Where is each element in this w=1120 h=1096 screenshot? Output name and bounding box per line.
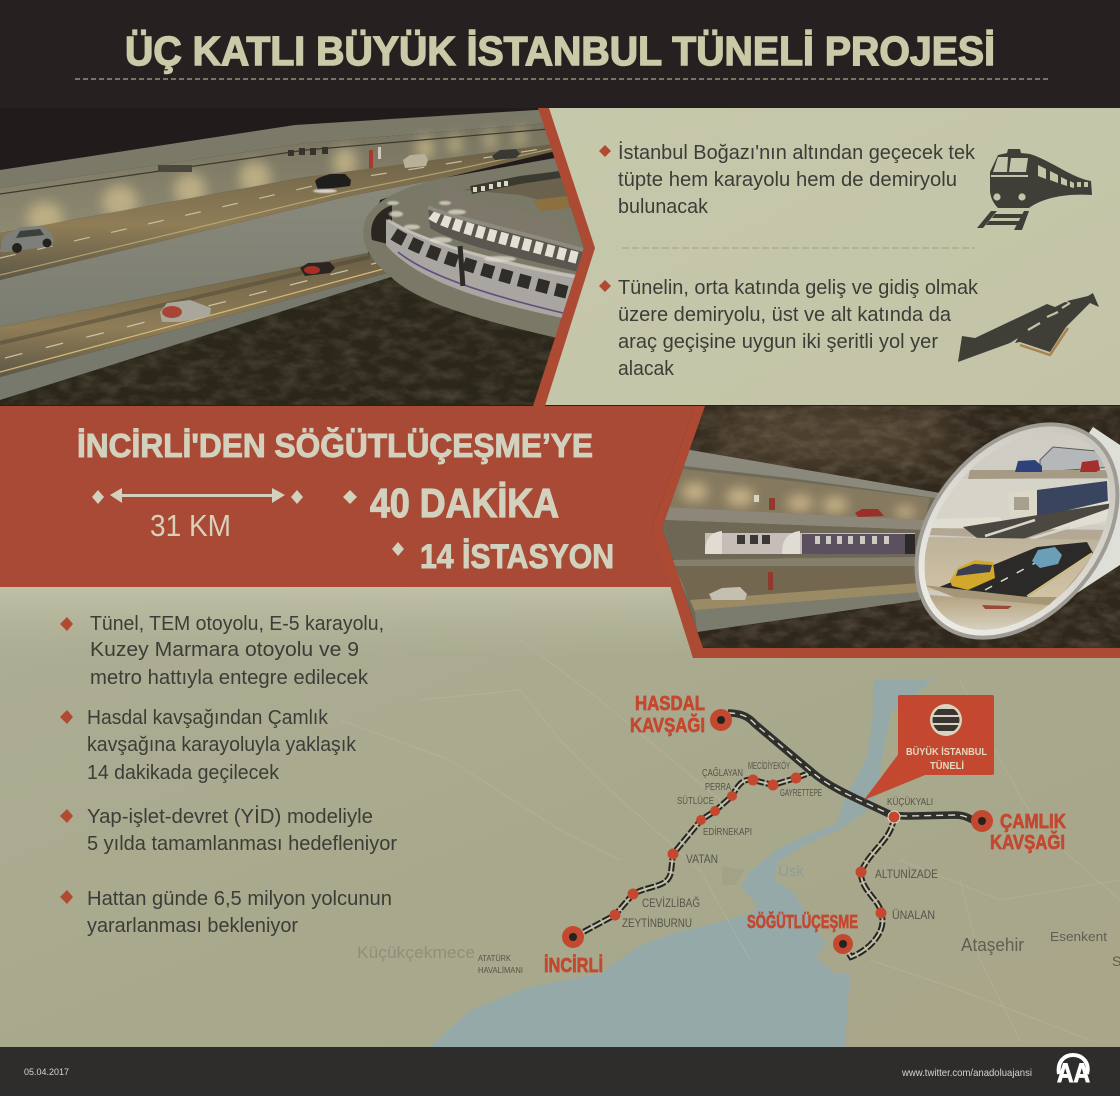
bullet item 1 xyxy=(60,612,384,689)
text: first panel paragraph xyxy=(618,141,976,218)
lower road xyxy=(937,542,1093,597)
bullet item 3: Yap-işlet-devret (YİD) modeliyle xyxy=(87,805,373,828)
station labels: VATAN xyxy=(686,852,718,866)
photo: tunnel cross-section xyxy=(662,406,1120,648)
chevron border: cross-section photo xyxy=(652,406,1120,658)
middle concrete slab xyxy=(0,178,444,327)
middle level wall xyxy=(1108,481,1109,482)
station labels: SÜTLÜCE xyxy=(677,795,714,807)
label: Çamlık Kavşağı: ÇAMLIK xyxy=(1000,811,1066,833)
title: ÜÇ KATLI BÜYÜK İSTANBUL TÜNELİ PROJESİ xyxy=(125,28,995,74)
station labels: MECİDİYEKÖY xyxy=(748,759,790,772)
stat: 40 dakika: 40 DAKİKA xyxy=(370,480,559,526)
map label: Üsk: Üsk xyxy=(778,862,804,880)
label: Söğütlüçeşme: SÖĞÜTLÜÇEŞME xyxy=(747,911,858,932)
station labels: ÇAĞLAYAN xyxy=(702,766,743,779)
car: white rear xyxy=(160,300,211,322)
rock below tunnel xyxy=(0,278,555,405)
label: Çamlık Kavşağı: KAVŞAĞI xyxy=(990,830,1065,854)
map: water xyxy=(430,680,933,1047)
terminal: İncirli xyxy=(562,926,584,948)
car: grey suv xyxy=(0,226,54,253)
footer date: 05.04.2017 xyxy=(24,1067,69,1078)
text: second panel paragraph: araç geçişine uygun iki şeritli yol yer xyxy=(618,330,938,353)
tube interior xyxy=(924,446,1110,630)
blue car xyxy=(1032,547,1062,568)
right top panel xyxy=(544,108,1120,405)
bullet item 2: kavşağına karayoluyla yaklaşık xyxy=(87,733,357,756)
lit roofs xyxy=(387,201,516,262)
footer url: www.twitter.com/anadoluajansi xyxy=(901,1067,1032,1079)
bullet item 4 xyxy=(60,887,392,937)
map label: airport xyxy=(478,954,523,975)
band heading: İNCİRLİ'DEN SÖĞÜTLÜÇEŞME’YE xyxy=(77,427,593,464)
text: first panel paragraph: tüpte hem karayolu hem de demiryolu xyxy=(618,168,957,191)
lower slab xyxy=(923,585,1057,607)
label: Hasdal Kavşağı: KAVŞAĞI xyxy=(630,713,705,737)
map label: Küçükçekmece: Küçükçekmece xyxy=(357,943,475,962)
train in tube xyxy=(1037,481,1108,516)
callout: Büyük İstanbul Tüneli xyxy=(864,695,994,800)
bullet 2 xyxy=(599,280,611,292)
chevron border xyxy=(533,108,595,406)
bullet item 1: metro hattıyla entegre edilecek xyxy=(90,666,369,689)
light top strip of map xyxy=(0,587,693,658)
text: second panel paragraph: üzere demiryolu, üst ve alt katında da xyxy=(618,303,952,326)
lower slab edge xyxy=(0,273,391,400)
map label: airport: ATATÜRK xyxy=(478,954,512,963)
station labels: GAYRETTEPE xyxy=(780,788,822,799)
stat: 14 istasyon: 14 İSTASYON xyxy=(420,538,614,576)
car: white xyxy=(403,154,428,168)
logo: AA: AA xyxy=(1057,1058,1090,1088)
tunnel body xyxy=(655,450,940,632)
station labels xyxy=(622,759,938,930)
bullet item 2: 14 dakikada geçilecek xyxy=(87,761,280,784)
distance label: 31 KM xyxy=(150,508,231,543)
station labels: PERRA xyxy=(705,782,731,793)
car: black xyxy=(313,174,351,193)
icon: train xyxy=(977,149,1092,230)
tube ring xyxy=(914,422,1120,640)
station labels: ZEYTİNBURNU xyxy=(622,916,692,930)
callout: Büyük İstanbul Tüneli: TÜNELİ xyxy=(930,759,964,772)
bullet list xyxy=(60,612,397,937)
text: first panel paragraph: bulunacak xyxy=(618,195,709,218)
footer bar xyxy=(0,1047,1120,1096)
trains in tunnel xyxy=(705,531,915,554)
bullet item 4: yararlanması bekleniyor xyxy=(87,914,298,937)
bullet item 3 xyxy=(60,805,397,855)
lower level xyxy=(925,537,1100,600)
tunnel mouth xyxy=(371,205,392,245)
text: second panel paragraph: alacak xyxy=(618,357,675,380)
label: Çamlık Kavşağı xyxy=(990,811,1066,854)
terminal: Çamlık xyxy=(971,810,993,832)
upper road xyxy=(0,143,560,280)
top level xyxy=(1040,446,1105,470)
callout: Büyük İstanbul Tüneli: BÜYÜK İSTANBUL xyxy=(906,745,988,758)
text: second panel paragraph: Tünelin, orta katında geliş ve gidiş olmak xyxy=(618,276,979,299)
white tube extension xyxy=(1032,427,1120,627)
photo: tunnel perspective with train xyxy=(0,108,600,405)
map: faint roads xyxy=(340,640,1120,1040)
icon: road arrow xyxy=(958,293,1099,362)
station labels: KÜÇÜKYALI xyxy=(887,796,933,808)
red band xyxy=(0,406,695,587)
map label: Esenkent: Esenkent xyxy=(1050,929,1107,944)
route: rail east xyxy=(843,817,894,957)
map background xyxy=(0,587,1120,1047)
label: Hasdal Kavşağı xyxy=(630,693,705,737)
rock wall above train xyxy=(440,180,583,250)
yellow van xyxy=(950,560,995,590)
terminal: Söğütlüçeşme xyxy=(833,934,853,954)
terminal: Hasdal xyxy=(710,709,732,731)
lower road xyxy=(0,253,387,377)
route: main tunnel road xyxy=(728,713,975,821)
car: red xyxy=(300,262,335,276)
map label: airport: HAVALİMANI xyxy=(478,966,523,975)
distance arrow xyxy=(92,488,303,504)
station labels: ALTUNİZADE xyxy=(875,867,938,881)
curved train section xyxy=(363,158,584,338)
station labels: EDİRNEKAPI xyxy=(703,825,752,838)
bullet item 3: 5 yılda tamamlanması hedefleniyor xyxy=(87,832,397,855)
station labels: CEVİZLİBAĞ xyxy=(642,895,700,910)
station dots xyxy=(610,772,900,920)
label: Hasdal Kavşağı: HASDAL xyxy=(635,693,705,715)
ring body xyxy=(363,158,584,338)
header background xyxy=(0,0,1120,108)
bullet item 4: Hattan günde 6,5 milyon yolcunun xyxy=(87,887,392,910)
white car in tunnel xyxy=(709,587,747,600)
upper curved train xyxy=(428,205,583,273)
text: first panel paragraph: İstanbul Boğazı'nın altından geçecek tek xyxy=(618,141,976,164)
bullet 1 xyxy=(599,145,611,157)
upper lit wall xyxy=(0,122,560,234)
bullet item 2 xyxy=(60,706,357,784)
bullet item 1: Tünel, TEM otoyolu, E-5 karayolu, xyxy=(90,612,384,635)
map label: Ataşehir: Ataşehir xyxy=(961,935,1024,955)
route: rail west xyxy=(574,772,812,937)
station labels: ÜNALAN xyxy=(892,908,935,922)
text: second panel paragraph xyxy=(618,276,979,380)
front curved train xyxy=(386,219,585,320)
background train xyxy=(470,171,561,194)
middle floor xyxy=(932,500,1110,530)
bullet item 1: Kuzey Marmara otoyolu ve 9 xyxy=(90,638,359,661)
icon: tunnel cross-section xyxy=(930,704,962,736)
car: dark xyxy=(492,149,520,160)
label: İncirli: İNCİRLİ xyxy=(544,954,603,977)
background road xyxy=(464,178,570,208)
bullet item 2: Hasdal kavşağından Çamlık xyxy=(87,706,329,729)
upper concrete crown xyxy=(0,110,560,188)
